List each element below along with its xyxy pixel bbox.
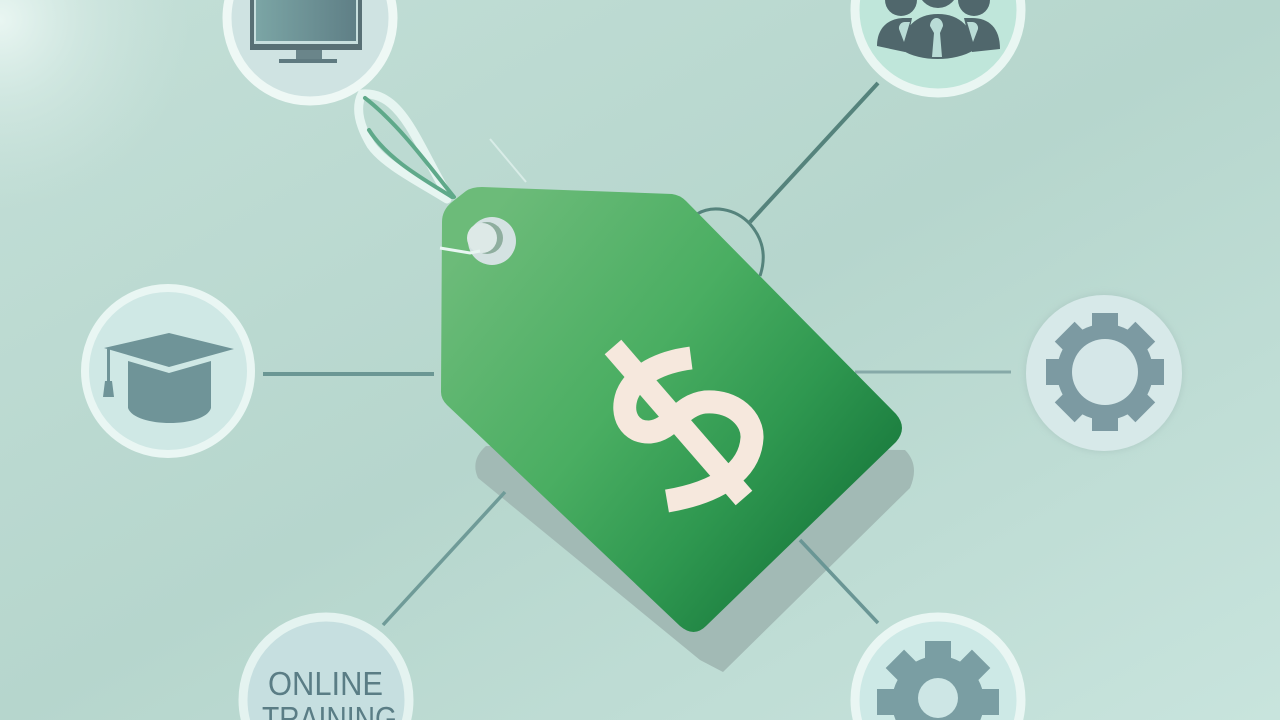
tag body	[441, 187, 902, 632]
faint light streak	[490, 139, 526, 182]
graduation circle	[85, 288, 251, 454]
people icon	[877, 0, 1000, 59]
connector: graduation cap to tag	[263, 372, 434, 376]
node: people	[855, 0, 1021, 93]
node: online training	[243, 617, 409, 720]
node: lower gear	[855, 617, 1021, 720]
graduation cap icon	[103, 333, 234, 423]
tag shadow	[475, 446, 914, 672]
people circle	[855, 0, 1021, 93]
dollar sign	[613, 347, 752, 501]
connector: settings gear to tag	[855, 370, 1011, 374]
tag hole	[440, 217, 516, 265]
node: graduation cap	[85, 288, 251, 454]
monitor circle	[227, 0, 393, 101]
lower gear circle	[855, 617, 1021, 720]
price tag	[440, 187, 902, 632]
online training circle	[243, 617, 409, 720]
settings circle	[1024, 293, 1184, 453]
node: monitor	[227, 0, 393, 101]
online training label	[262, 665, 397, 720]
connector: lower gear to tag	[800, 540, 878, 623]
connector: online training to tag	[383, 492, 505, 625]
connector: people to tag	[697, 83, 878, 276]
node: settings gear	[1024, 293, 1184, 453]
string loop	[359, 94, 454, 199]
lower gear icon	[877, 641, 999, 720]
gear icon	[1046, 313, 1164, 431]
online training label: ONLINE	[268, 665, 383, 702]
monitor icon	[250, 0, 362, 63]
